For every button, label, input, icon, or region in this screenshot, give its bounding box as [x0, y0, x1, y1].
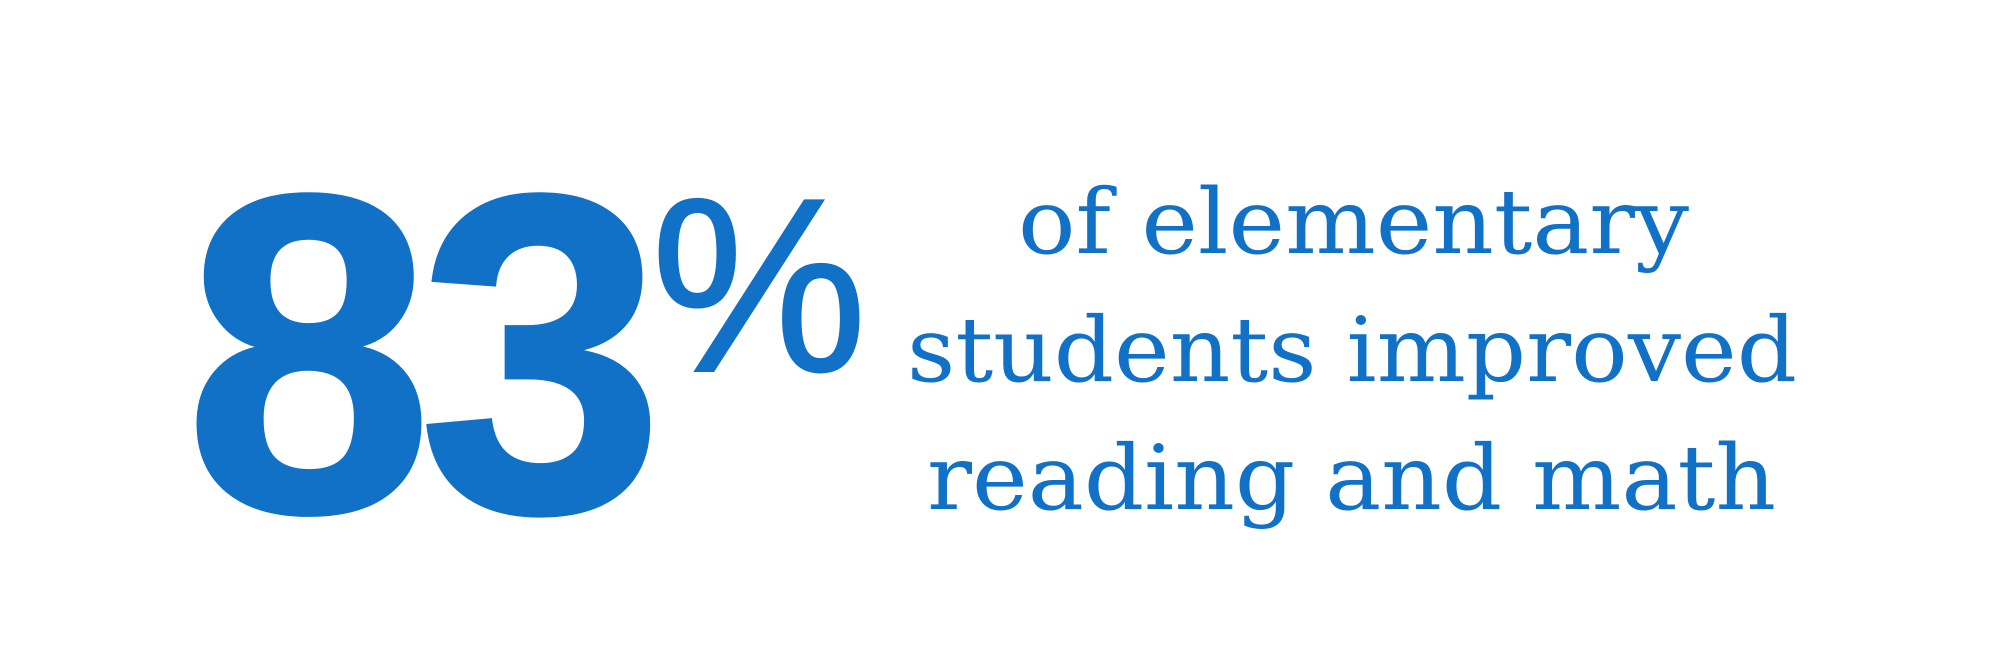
statistic description: reading and math: [927, 426, 1776, 531]
percent sign: %: [651, 148, 867, 425]
statistic description: [907, 170, 1797, 531]
statistic description: students improved: [907, 298, 1797, 403]
big number: 83: [184, 101, 664, 607]
statistic description: of elementary: [1018, 170, 1689, 275]
big number: 83: 8: [184, 101, 433, 607]
big number: 83: 3: [418, 101, 664, 607]
